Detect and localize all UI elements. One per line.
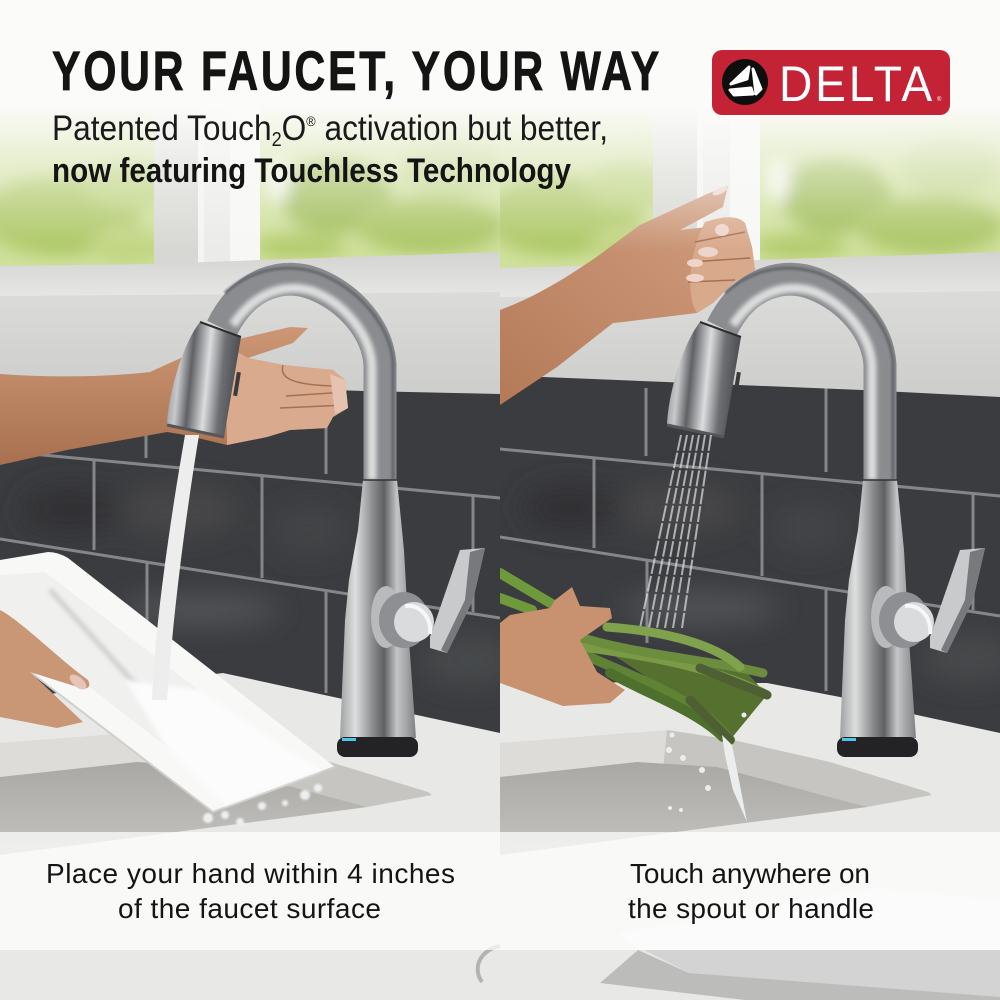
caption right: the spout or handle [628,893,874,924]
panel: right kitchen photo [500,116,1000,1000]
water splash [203,784,322,826]
hand holding plate [0,610,89,728]
subtitle line 1: activation but better, [316,109,608,148]
wall right [500,291,1000,397]
icon: delta mark [722,59,768,105]
countertop left [0,673,500,1000]
subtitle line 1: ® [306,113,316,129]
sink left [0,730,432,855]
Delta logo: ® [937,96,942,103]
object ring at left foreground [478,946,500,982]
water drips [666,712,747,822]
arm and hand touching spout [500,185,755,405]
caption left: of the faucet surface [118,893,381,924]
plate in lower right foreground [600,888,1000,1000]
windowsill right [500,252,1000,284]
faucet right [667,268,985,757]
subtitle line 2: now featuring Touchless Technology [52,152,571,190]
window view left [0,116,500,266]
tile backsplash left [0,375,520,740]
asparagus bundle [500,573,767,740]
Delta logo: DELTA [779,56,935,112]
sink right [500,730,932,855]
subtitle line 1: Patented Touch [52,109,295,148]
water spray [640,435,711,628]
arm and hand near faucet [0,327,348,465]
fingernails [686,185,729,282]
caption left [46,858,455,924]
water stream [152,435,199,700]
panel: left kitchen photo [0,116,500,1000]
caption band left [0,832,500,950]
caption left: Place your hand within 4 inches [46,858,455,889]
title: YOUR FAUCET, YOUR WAY [52,39,662,102]
caption band right [500,832,1000,950]
wall left [0,292,500,394]
tile backsplash right [500,373,1000,738]
top white fade [0,0,1000,250]
Delta logo [712,50,950,115]
hand holding asparagus [500,587,625,706]
windowsill left [0,252,500,284]
countertop right [500,682,1000,1000]
caption right [628,858,874,924]
white plate [0,552,335,826]
faucet left [167,268,485,757]
window view right [500,116,1000,268]
subtitle line 1: O [282,109,306,148]
subtitle line 1: 2 [272,129,282,151]
water sheet on plate [125,680,320,805]
caption right: Touch anywhere on [630,858,870,889]
